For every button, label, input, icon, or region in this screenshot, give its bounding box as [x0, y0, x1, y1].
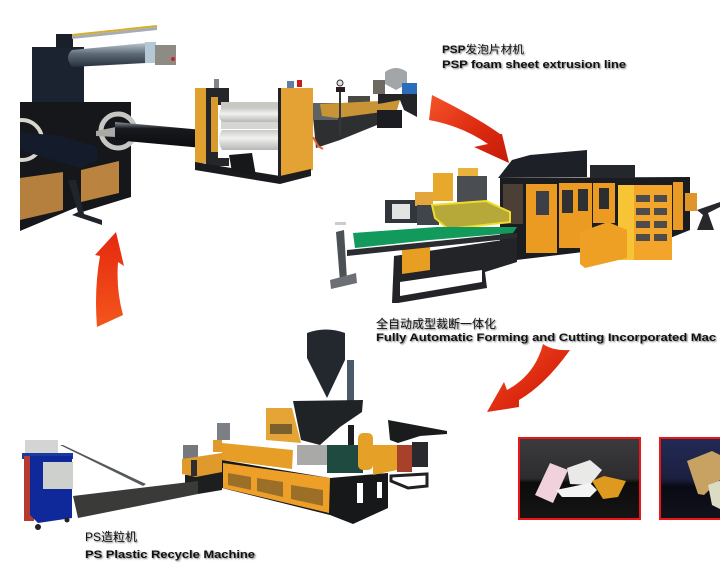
part: small screen changer — [182, 423, 230, 494]
part: electrical cabinet — [618, 185, 672, 260]
part: control box — [266, 408, 301, 443]
heading: fully automatic forming and cutting: Fully Automatic Forming and Cutting Incorporated Mac : — [376, 332, 720, 344]
heading: fully automatic forming and cutting: 全自动成型裁断一体化 — [376, 316, 496, 331]
arrow: forming machine to products — [487, 344, 570, 412]
arrow: extruder to forming machine — [429, 95, 509, 163]
machine: foam extruder — [313, 68, 417, 149]
part: extruder body — [222, 433, 397, 524]
part: crusher — [388, 420, 447, 488]
arrow: recycle machine to extruder — [95, 232, 124, 327]
part: hopper — [293, 330, 363, 445]
machine: forming and cutting — [330, 150, 720, 303]
heading: PS plastic recycle machine — [85, 529, 255, 561]
machine: PS plastic recycle — [22, 330, 447, 530]
photo: food trays — [660, 438, 720, 519]
part: blue feeder cabinet — [22, 440, 73, 530]
part: main body — [498, 150, 690, 262]
heading: PSP foam sheet extrusion line — [442, 42, 626, 71]
photo: foam products — [519, 438, 640, 519]
heading: fully automatic forming and cutting — [376, 316, 720, 344]
heading: PSP foam sheet extrusion line: PSP发泡片材机 — [442, 42, 524, 56]
heading: PSP foam sheet extrusion line: PSP foam sheet extrusion line — [442, 59, 626, 71]
part: conveyor and frame — [347, 227, 517, 303]
heading: PS plastic recycle machine: PS Plastic Recycle Machine — [85, 549, 255, 561]
part: stacker — [385, 168, 510, 229]
heading: PS plastic recycle machine: PS造粒机 — [85, 529, 137, 544]
part: side stand — [330, 222, 357, 289]
machine: sheet winder — [20, 25, 195, 231]
machine: roller calender — [195, 79, 313, 184]
